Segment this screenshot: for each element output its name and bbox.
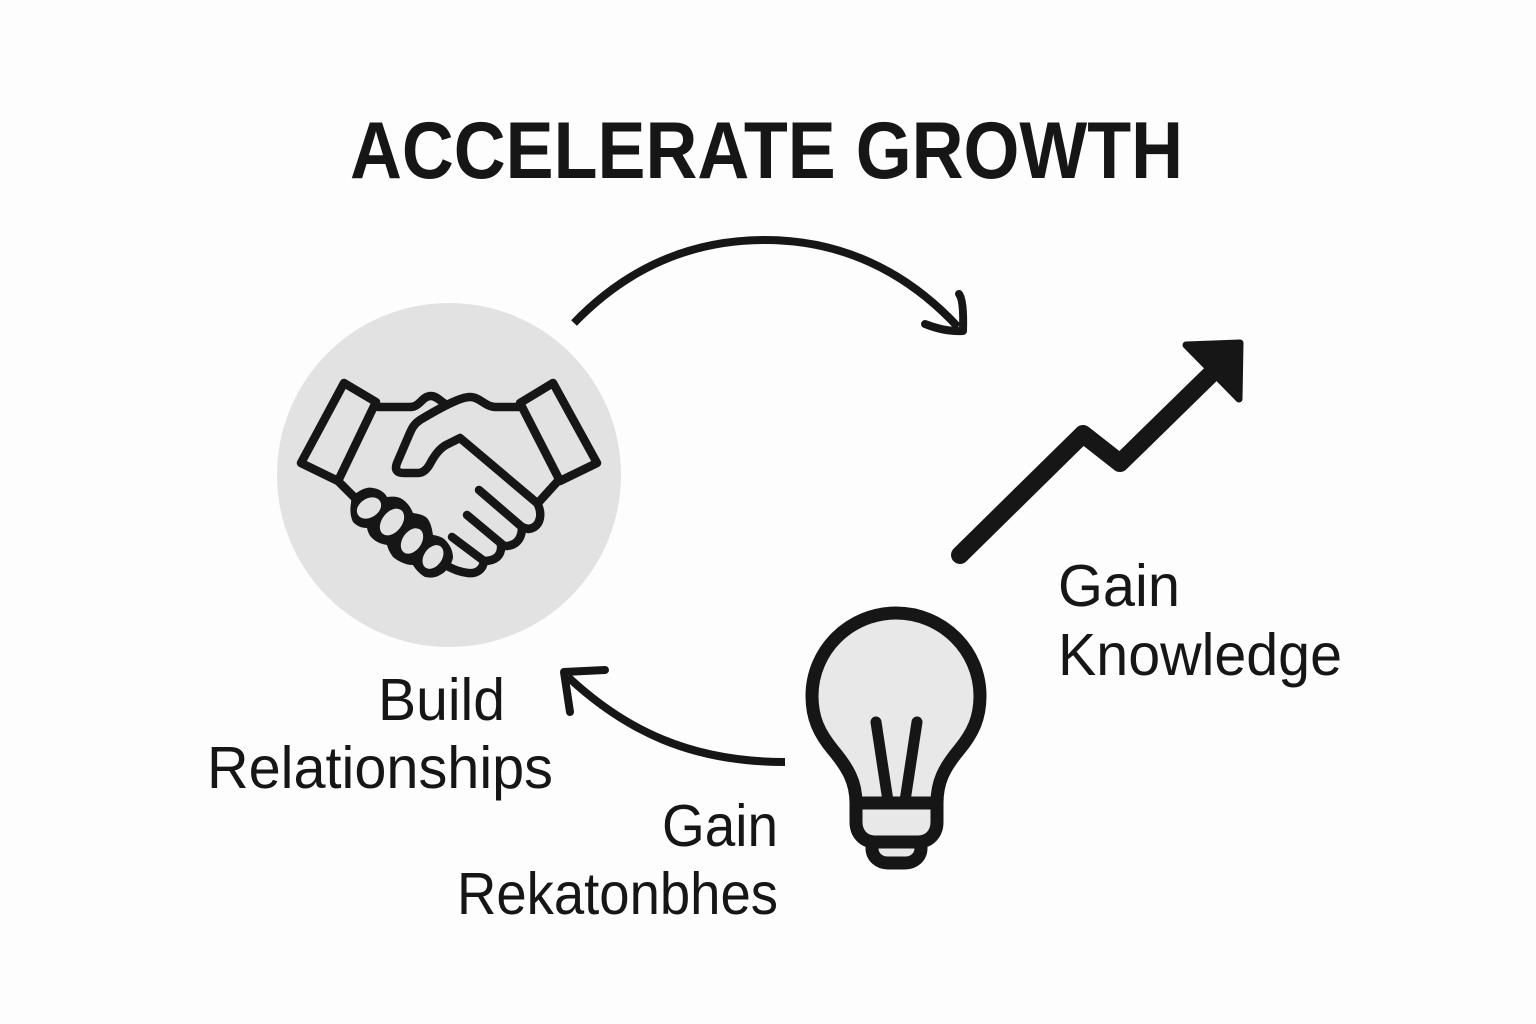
label: gain knowledge: Knowledge xyxy=(1058,622,1342,688)
bulb base xyxy=(856,803,937,842)
arrow: top curved arrow to growth xyxy=(574,240,963,331)
label: build relationships: Relationships xyxy=(207,735,553,801)
label: gain knowledge: Gain xyxy=(1058,553,1180,619)
bulb cap xyxy=(872,842,921,863)
label: build relationships xyxy=(207,667,553,801)
handshake lines xyxy=(301,383,597,573)
label: gain rekatonbhes: Rekatonbhes xyxy=(457,861,778,927)
icon: growth arrow xyxy=(960,343,1240,555)
filaments xyxy=(876,722,917,801)
label: gain rekatonbhes xyxy=(457,793,778,927)
label: gain knowledge xyxy=(1058,553,1342,688)
arrow: curved arrow to relationships xyxy=(564,670,785,762)
knuckle holes xyxy=(353,493,448,573)
title: ACCELERATE GROWTH xyxy=(350,106,1183,196)
icon: handshake in grey circle xyxy=(277,303,621,647)
knuckles outline xyxy=(350,488,453,578)
label: build relationships: Build xyxy=(378,667,505,733)
icon: light bulb xyxy=(812,613,980,863)
label: gain rekatonbhes: Gain xyxy=(662,793,778,859)
bulb glass xyxy=(812,613,980,803)
grey circle xyxy=(277,303,621,647)
